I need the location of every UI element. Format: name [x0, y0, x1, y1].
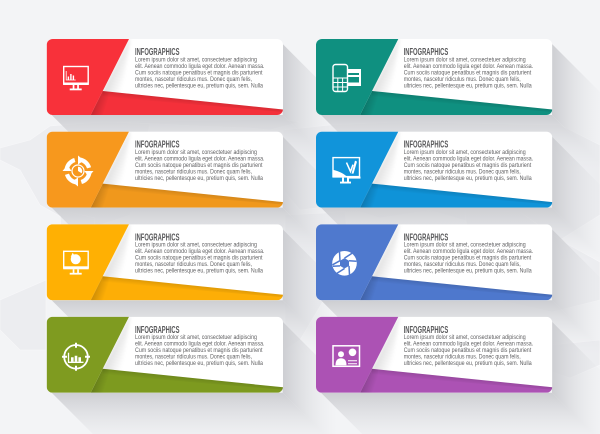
body text [135, 334, 265, 367]
body text: ultricies nec, pellentesque eu, pretium quis, sem. Nulla [404, 360, 532, 367]
body text [404, 242, 533, 275]
icon: phone and credit card [333, 64, 361, 92]
body text: ultricies nec, pellentesque eu, pretium quis, sem. Nulla [135, 175, 263, 182]
world map backdrop [0, 118, 600, 378]
body text: Cum sociis natoque penatibus et magnis dis parturient [135, 162, 263, 169]
panel: blue monitor with arrow [316, 132, 588, 244]
body text: Lorem ipsum dolor sit amet, consectetuer adipiscing [404, 334, 526, 341]
panel: teal phone and card [316, 39, 588, 144]
body text: montes, nascetur ridiculus mus. Donec quam felis, [135, 261, 252, 268]
body text: Cum sociis natoque penatibus et magnis dis parturient [404, 69, 531, 76]
body text: elit. Aenean commodo ligula eget dolor. Aenean massa. [135, 63, 265, 70]
body text: montes, nascetur ridiculus mus. Donec quam felis, [135, 354, 252, 361]
body text: elit. Aenean commodo ligula eget dolor. Aenean massa. [135, 248, 265, 255]
body text: Lorem ipsum dolor sit amet, consectetuer adipiscing [135, 242, 257, 249]
body text [135, 56, 265, 89]
panel: yellow monitor pie [46, 224, 318, 336]
body text: elit. Aenean commodo ligula eget dolor. Aenean massa. [404, 248, 533, 255]
body text: montes, nascetur ridiculus mus. Donec quam felis, [404, 168, 521, 175]
heading: INFOGRAPHICS [135, 325, 180, 336]
body text [404, 149, 533, 182]
body text [135, 242, 265, 275]
body text: Cum sociis natoque penatibus et magnis dis parturient [135, 347, 263, 354]
icon: monitor with pie chart [63, 251, 89, 275]
body text: Lorem ipsum dolor sit amet, consectetuer adipiscing [404, 56, 526, 63]
icon: circular arrows around pie [62, 156, 94, 186]
body text: elit. Aenean commodo ligula eget dolor. Aenean massa. [404, 155, 533, 162]
body text: ultricies nec, pellentesque eu, pretium quis, sem. Nulla [404, 268, 532, 275]
heading: INFOGRAPHICS [135, 140, 180, 151]
icon: monitor with bar chart [63, 66, 89, 90]
body text: Lorem ipsum dolor sit amet, consectetuer adipiscing [404, 149, 526, 156]
panel: red monitor chart [46, 39, 318, 144]
panel: orange rotating arrows [46, 132, 320, 238]
body text [135, 149, 265, 182]
icon: presentation board [333, 346, 360, 366]
body text: ultricies nec, pellentesque eu, pretium quis, sem. Nulla [135, 360, 263, 367]
body text: Cum sociis natoque penatibus et magnis dis parturient [404, 347, 531, 354]
body text: ultricies nec, pellentesque eu, pretium quis, sem. Nulla [135, 268, 263, 275]
body text: Lorem ipsum dolor sit amet, consectetuer adipiscing [404, 242, 526, 249]
icon: target with bars [62, 343, 90, 371]
panel: indigo camera aperture [316, 224, 588, 334]
body text: montes, nascetur ridiculus mus. Donec quam felis, [404, 76, 521, 83]
body text: Cum sociis natoque penatibus et magnis dis parturient [404, 255, 531, 262]
heading: INFOGRAPHICS [135, 47, 180, 58]
body text: ultricies nec, pellentesque eu, pretium quis, sem. Nulla [135, 82, 263, 89]
body text: elit. Aenean commodo ligula eget dolor. Aenean massa. [404, 63, 533, 70]
panel: green target chart [46, 316, 318, 428]
icon: monitor with arrow [332, 158, 360, 184]
body text: Cum sociis natoque penatibus et magnis dis parturient [404, 162, 531, 169]
heading: INFOGRAPHICS [404, 47, 448, 58]
body text: Lorem ipsum dolor sit amet, consectetuer adipiscing [135, 149, 257, 156]
heading: INFOGRAPHICS [404, 232, 448, 243]
body text: Lorem ipsum dolor sit amet, consectetuer adipiscing [135, 334, 257, 341]
body text: Lorem ipsum dolor sit amet, consectetuer adipiscing [135, 56, 257, 63]
icon: aperture [332, 251, 357, 276]
body text: Cum sociis natoque penatibus et magnis dis parturient [135, 255, 263, 262]
panel: purple presentation [316, 317, 600, 434]
heading: INFOGRAPHICS [404, 140, 448, 151]
body text: montes, nascetur ridiculus mus. Donec quam felis, [404, 354, 521, 361]
body text: ultricies nec, pellentesque eu, pretium quis, sem. Nulla [404, 175, 532, 182]
body text: Cum sociis natoque penatibus et magnis dis parturient [135, 69, 263, 76]
heading: INFOGRAPHICS [404, 325, 448, 336]
body text: elit. Aenean commodo ligula eget dolor. Aenean massa. [135, 341, 265, 348]
body text: elit. Aenean commodo ligula eget dolor. Aenean massa. [404, 341, 533, 348]
body text: montes, nascetur ridiculus mus. Donec quam felis, [135, 76, 252, 83]
body text: elit. Aenean commodo ligula eget dolor. Aenean massa. [135, 155, 265, 162]
body text: ultricies nec, pellentesque eu, pretium quis, sem. Nulla [404, 82, 532, 89]
body text [404, 56, 533, 89]
body text [404, 334, 533, 367]
body text: montes, nascetur ridiculus mus. Donec quam felis, [135, 168, 252, 175]
heading: INFOGRAPHICS [135, 232, 180, 243]
body text: montes, nascetur ridiculus mus. Donec quam felis, [404, 261, 521, 268]
